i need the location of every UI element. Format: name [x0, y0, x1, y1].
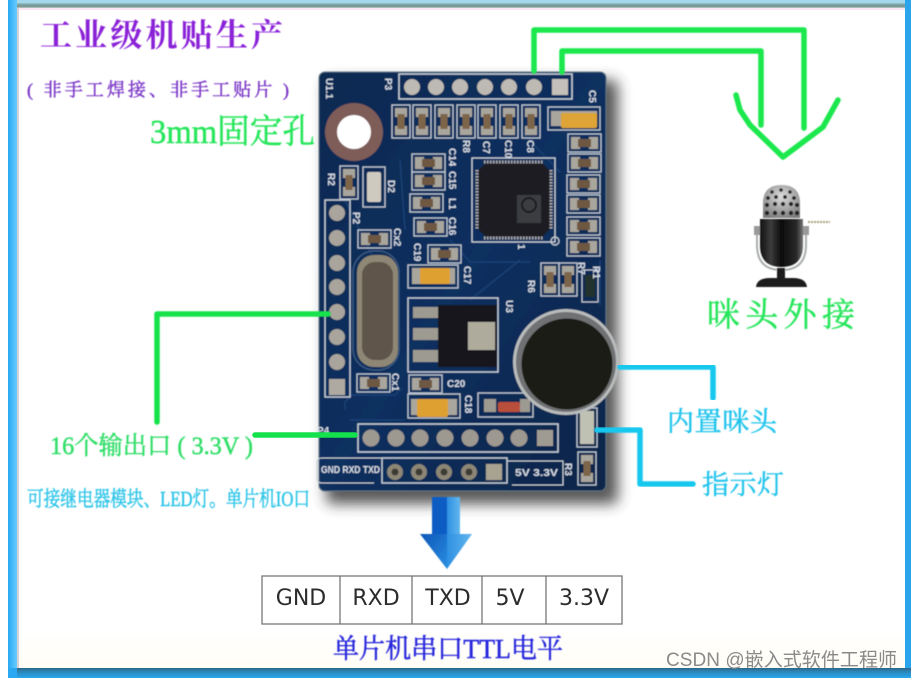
- diode: [478, 393, 533, 417]
- table: serial pin names: RXD: [352, 586, 400, 611]
- label: 指示灯: 指示灯: [702, 470, 784, 500]
- silkscreen labels: Cx1: [389, 373, 400, 392]
- header P4: [358, 424, 558, 452]
- QFP chip: [472, 158, 559, 245]
- serial header: GND RXD TXD: [321, 465, 380, 476]
- silkscreen labels: C8: [524, 140, 535, 153]
- green wire: output P2: [157, 314, 328, 422]
- R2 and D2: [340, 166, 385, 207]
- capacitor C17: [408, 265, 458, 288]
- silkscreen labels: P4: [317, 426, 330, 437]
- silkscreen labels: C20: [447, 379, 466, 390]
- silkscreen labels: [317, 78, 601, 476]
- Cx2: [358, 230, 391, 248]
- silkscreen labels: D2: [385, 180, 396, 193]
- table: serial pin names: TXD: [424, 586, 471, 611]
- board shadow: [326, 80, 618, 504]
- table: serial pin names: 3.3V: [559, 586, 609, 611]
- serial header: [317, 458, 563, 485]
- silkscreen labels: R2: [325, 173, 336, 186]
- R6 R7 R1: [541, 263, 598, 302]
- silkscreen labels: P3: [382, 78, 393, 91]
- silkscreen labels: R6: [525, 280, 536, 293]
- C20 and Cx1: [357, 374, 442, 393]
- heading: 工业级机贴生产: 工业级机贴生产: [40, 17, 283, 53]
- capacitor C5: [548, 107, 600, 130]
- label: 16 outputs: 16个输出口 ( 3.3V ): [50, 432, 253, 460]
- cyan wire: microphone: [620, 367, 713, 398]
- silkscreen labels: C17: [461, 266, 472, 285]
- silkscreen labels: C7: [480, 141, 491, 154]
- arrow: down to serial pins: [420, 497, 472, 569]
- table: serial pin names: GND: [276, 586, 326, 611]
- silkscreen labels: U1.1: [323, 78, 334, 100]
- silkscreen labels: C5: [586, 90, 597, 103]
- green wire: output P4: [255, 432, 355, 438]
- mounting hole: [325, 103, 383, 161]
- silkscreen labels: C16: [446, 217, 457, 236]
- watermark: CSDN @嵌入式软件工程师: [666, 649, 897, 671]
- silkscreen labels: C18: [462, 395, 473, 414]
- silkscreen labels: U3: [503, 300, 514, 313]
- circuit board: [317, 72, 619, 491]
- serial header: 5V 3.3V: [515, 468, 558, 479]
- label: 3mm 固定孔: 3mm固定孔: [150, 113, 315, 151]
- regulator U3: [408, 298, 498, 372]
- onboard microphone: [513, 309, 619, 415]
- silkscreen labels: Cx2: [391, 228, 402, 247]
- green wires to external mic: [534, 30, 838, 157]
- icon: external microphone: [754, 185, 830, 287]
- silkscreen labels: R1: [590, 266, 601, 279]
- resistor row: [392, 105, 540, 138]
- table: serial pin names: [262, 576, 622, 624]
- silkscreen labels: P2: [350, 212, 361, 225]
- silkscreen labels: R3: [562, 463, 573, 476]
- right component column: [567, 134, 601, 256]
- subheading: ( 非手工焊接、非手工贴片 ): [27, 80, 289, 101]
- silkscreen labels: C10: [502, 140, 513, 159]
- silkscreen labels: C14: [446, 148, 457, 167]
- LED and R3: [577, 408, 597, 485]
- silkscreen labels: C19: [411, 243, 422, 262]
- silkscreen labels: R8: [460, 140, 471, 153]
- header P3: [399, 74, 572, 99]
- C19: [428, 245, 461, 263]
- note: compatible loads: 可接继电器模块、LED灯。单片机IO口: [27, 487, 310, 511]
- silkscreen labels: C15: [446, 171, 457, 190]
- header P2: [325, 200, 350, 397]
- label: 内置咪头: 内置咪头: [667, 407, 778, 437]
- table: serial pin names: 5V: [495, 586, 525, 611]
- label: 咪头外接: 咪头外接: [707, 297, 856, 334]
- silkscreen labels: L1: [446, 198, 457, 210]
- silkscreen labels: R7: [575, 262, 586, 275]
- silkscreen labels: 1: [515, 244, 526, 250]
- capacitor C18: [408, 394, 460, 418]
- crystal: [353, 251, 399, 370]
- capacitors C14 C15 L1 C16: [410, 154, 447, 236]
- caption: 单片机串口 TTL 电平: 单片机串口TTL电平: [333, 634, 563, 664]
- cyan wire: indicator: [597, 430, 693, 484]
